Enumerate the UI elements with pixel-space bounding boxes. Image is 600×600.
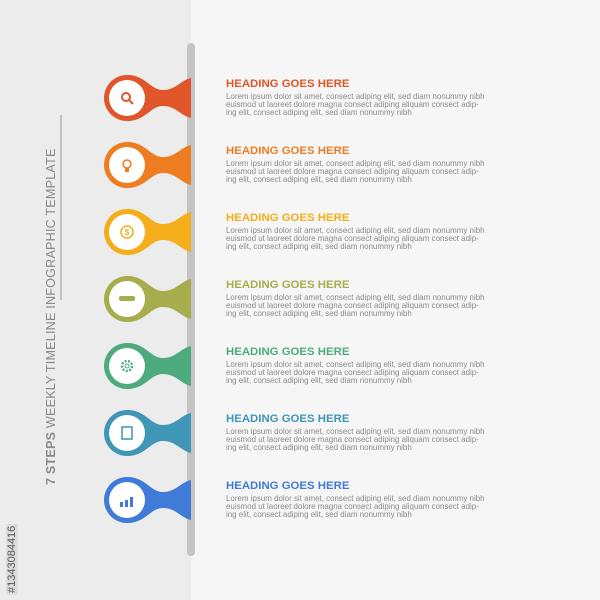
step 2 text xyxy=(226,145,485,184)
step 3 marker xyxy=(104,209,191,255)
step 6 marker xyxy=(104,410,191,456)
step 5 text: ing elit, consect adiping elit, sed diam nonummy nibh xyxy=(226,376,412,385)
step 6 text: HEADING GOES HERE xyxy=(226,413,349,425)
step 6 text: Lorem ipsum dolor sit amet, consect adiping elit, sed diam nonummy nibh xyxy=(226,427,485,436)
step 6 text: ing elit, consect adiping elit, sed diam nonummy nibh xyxy=(226,443,412,452)
step 3 text xyxy=(226,212,485,251)
step 2 text: euismod ut laoreet dolore magna consect adiping aliquam consect adip- xyxy=(226,167,479,176)
step 3 text: Lorem ipsum dolor sit amet, consect adiping elit, sed diam nonummy nibh xyxy=(226,226,485,235)
step 6 text xyxy=(226,413,485,452)
step 5 text: euismod ut laoreet dolore magna consect adiping aliquam consect adip- xyxy=(226,368,479,377)
step 3 marker: $ xyxy=(125,228,130,237)
step 7 marker xyxy=(104,477,191,523)
step 2 text: ing elit, consect adiping elit, sed diam nonummy nibh xyxy=(226,175,412,184)
step 7 text: HEADING GOES HERE xyxy=(226,480,349,492)
step 6 text: euismod ut laoreet dolore magna consect adiping aliquam consect adip- xyxy=(226,435,479,444)
step 3 text: euismod ut laoreet dolore magna consect adiping aliquam consect adip- xyxy=(226,234,479,243)
step 7 text: Lorem ipsum dolor sit amet, consect adiping elit, sed diam nonummy nibh xyxy=(226,494,485,503)
watermark id: #1343084416 xyxy=(6,526,18,593)
step 1 text: euismod ut laoreet dolore magna consect adiping aliquam consect adip- xyxy=(226,100,479,109)
step 4 text: euismod ut laoreet dolore magna consect adiping aliquam consect adip- xyxy=(226,301,479,310)
step 2 text: Lorem ipsum dolor sit amet, consect adiping elit, sed diam nonummy nibh xyxy=(226,159,485,168)
step 1 text: Lorem ipsum dolor sit amet, consect adiping elit, sed diam nonummy nibh xyxy=(226,92,485,101)
step 7 text: ing elit, consect adiping elit, sed diam nonummy nibh xyxy=(226,510,412,519)
step 3 text: ing elit, consect adiping elit, sed diam nonummy nibh xyxy=(226,242,412,251)
step 7 text: euismod ut laoreet dolore magna consect adiping aliquam consect adip- xyxy=(226,502,479,511)
step 2 text: HEADING GOES HERE xyxy=(226,145,349,157)
step 7 text xyxy=(226,480,485,519)
step 5 text xyxy=(226,346,485,385)
step 4 text: ing elit, consect adiping elit, sed diam nonummy nibh xyxy=(226,309,412,318)
step 1 text: HEADING GOES HERE xyxy=(226,78,349,90)
step 4 text: Lorem ipsum dolor sit amet, consect adiping elit, sed diam nonummy nibh xyxy=(226,293,485,302)
step 4 text xyxy=(226,279,485,318)
step 5 marker xyxy=(104,343,191,389)
step 1 text xyxy=(226,78,485,117)
step 3 text: HEADING GOES HERE xyxy=(226,212,349,224)
step 4 marker xyxy=(104,276,191,322)
step 4 text: HEADING GOES HERE xyxy=(226,279,349,291)
step 1 text: ing elit, consect adiping elit, sed diam nonummy nibh xyxy=(226,108,412,117)
step 2 marker xyxy=(104,142,191,188)
vertical title: 7 STEPS WEEKLY TIMELINE INFOGRAPHIC TEMPLATE xyxy=(44,148,58,485)
step 5 text: HEADING GOES HERE xyxy=(226,346,349,358)
step 1 marker xyxy=(104,75,191,121)
step 5 text: Lorem ipsum dolor sit amet, consect adiping elit, sed diam nonummy nibh xyxy=(226,360,485,369)
